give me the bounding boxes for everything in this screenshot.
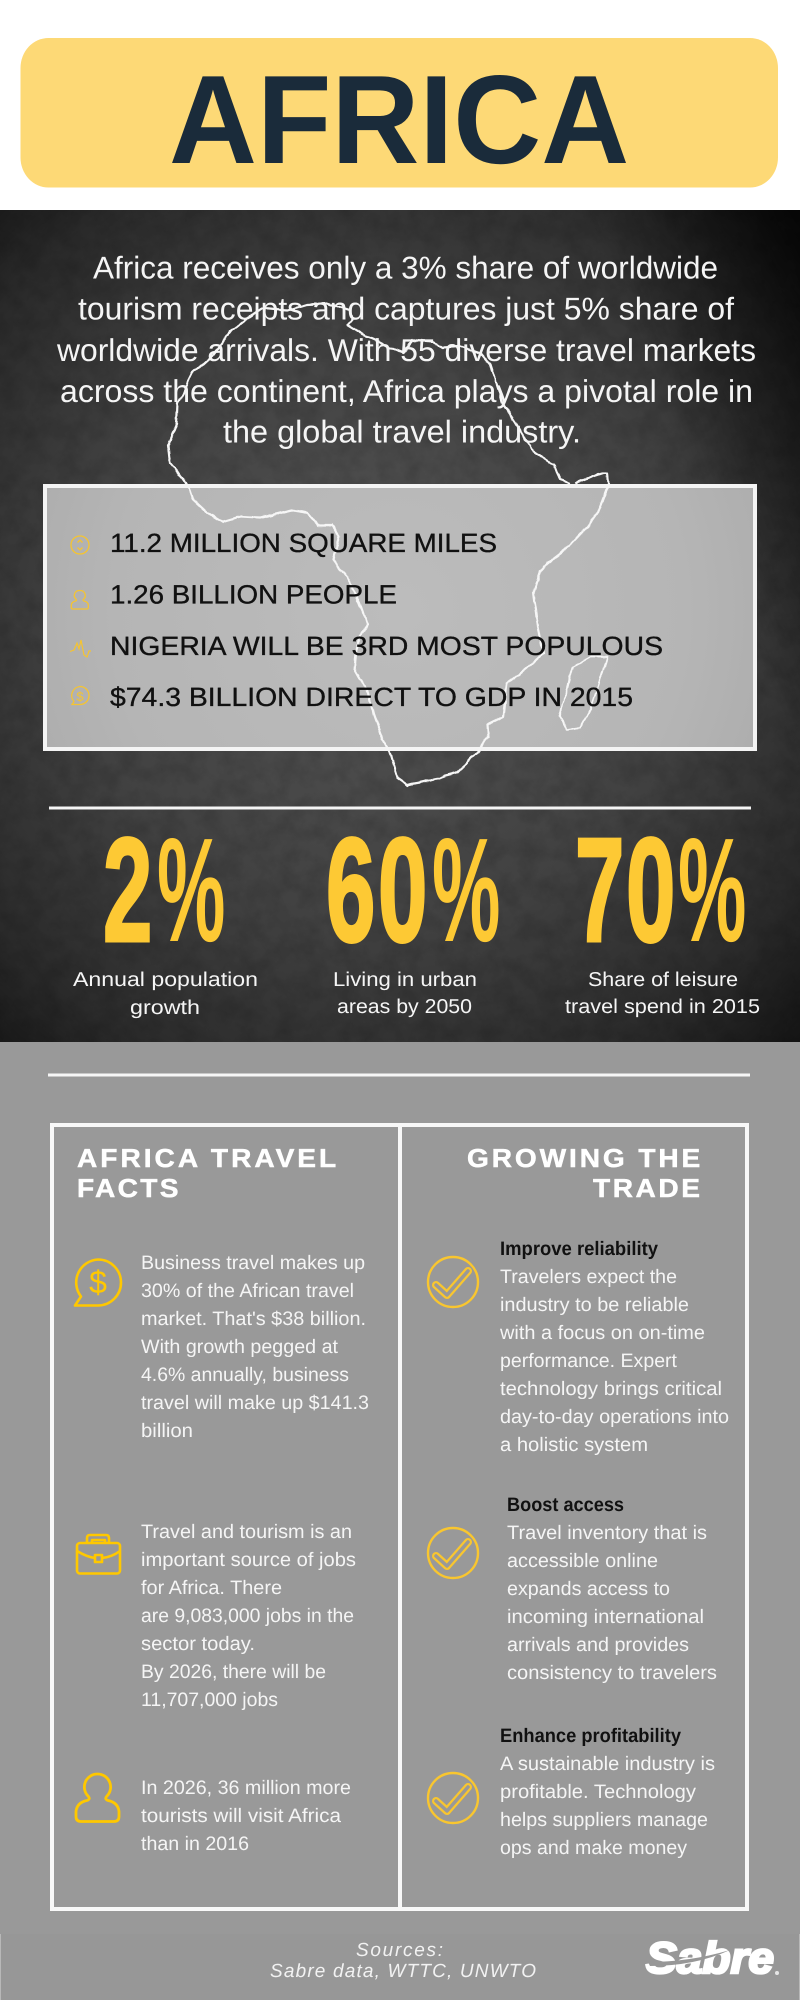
stat: 2% <box>73 808 258 1019</box>
text: business travel: 4.6% annually, business <box>141 1364 349 1386</box>
title banner <box>20 38 778 190</box>
text: tourists <box>141 1777 351 1855</box>
icon: dollar bubble small <box>72 686 89 704</box>
text: business travel: billion <box>141 1420 193 1442</box>
stat: 70%: % <box>678 808 746 973</box>
list: key statistics: NIGERIA WILL BE 3RD MOST POPULOUS <box>110 631 663 661</box>
text: boost access: expands access to <box>507 1578 670 1600</box>
stat: 70% <box>565 808 760 1018</box>
stat caption: Annual population <box>73 969 258 991</box>
text: boost access: incoming international <box>507 1606 704 1628</box>
panel: Africa travel facts <box>75 1143 369 1855</box>
text: jobs: 11,707,000 jobs <box>141 1689 278 1711</box>
panel: grey lower section <box>0 1042 800 2000</box>
text: business travel: With growth pegged at <box>141 1336 339 1358</box>
icon: dollar bubble small: $ <box>76 689 84 704</box>
text: improve reliability: Travelers expect the <box>500 1266 677 1288</box>
text: boost access: arrivals and provides <box>507 1634 689 1656</box>
text: improve reliability: a holistic system <box>500 1434 648 1456</box>
heading: FACTS <box>77 1173 179 1203</box>
text: tourists: than in 2016 <box>141 1833 249 1855</box>
stat: 60% <box>326 808 500 1018</box>
text: business travel: travel will make up $141.3 <box>141 1392 369 1414</box>
icon: dollar speech bubble: $ <box>89 1264 107 1300</box>
stat: 60%: 0 <box>378 808 427 973</box>
logo: Sabre: Sabre <box>646 1934 774 1983</box>
text: boost access: consistency to travelers <box>507 1662 717 1684</box>
map: outline of Africa <box>168 303 608 785</box>
stat caption <box>73 969 258 1019</box>
text: jobs: By 2026, there will be <box>141 1661 326 1683</box>
intro text <box>56 250 756 450</box>
heading: TRADE <box>593 1173 700 1203</box>
text: improve reliability: performance. Expert <box>500 1350 678 1372</box>
text: enhance profitability: helps suppliers manage <box>500 1809 708 1831</box>
stat caption: Living in urban <box>333 969 477 991</box>
intro text: worldwide arrivals. With 55 diverse travel markets <box>56 332 756 368</box>
icon: briefcase <box>77 1535 120 1574</box>
stat: 2%: % <box>157 808 225 973</box>
intro text: Africa receives only a 3% share of worldwide <box>93 250 718 286</box>
icon: dollar speech bubble <box>75 1260 121 1306</box>
icon: person <box>76 1774 119 1822</box>
text: business travel: 30% of the African travel <box>141 1280 354 1302</box>
text: boost access: accessible online <box>507 1550 658 1572</box>
text: improve reliability: with a focus on on-time <box>499 1322 705 1344</box>
text: business travel <box>141 1252 369 1442</box>
heading: GROWING THE <box>467 1143 700 1173</box>
text: tourists: In 2026, 36 million more <box>141 1777 351 1799</box>
text: improve reliability: industry to be reliable <box>500 1294 689 1316</box>
panel: two column frame <box>52 1125 747 1909</box>
text: boost access <box>507 1494 717 1684</box>
divider <box>49 806 751 810</box>
text: improve reliability: technology brings critical <box>500 1378 722 1400</box>
text: jobs: important source of jobs <box>141 1549 356 1571</box>
text: improve reliability <box>499 1238 729 1456</box>
list: key statistics: 11.2 MILLION SQUARE MILES <box>110 528 497 558</box>
stat: 70%: 0 <box>626 808 675 973</box>
icon: person small <box>71 590 88 609</box>
text: improve reliability: Improve reliability <box>500 1238 658 1260</box>
text: jobs: sector today. <box>141 1633 255 1655</box>
stat caption: areas by 2050 <box>337 996 472 1018</box>
text: enhance profitability <box>500 1725 715 1859</box>
panel: dark chalkboard overview <box>0 210 800 1042</box>
heading <box>77 1143 336 1203</box>
text: jobs: Travel and tourism is an <box>141 1521 352 1543</box>
text: jobs <box>141 1521 356 1711</box>
icon: area circle <box>71 536 89 554</box>
list: key statistics: $74.3 BILLION DIRECT TO GDP IN 2015 <box>110 682 633 712</box>
title: AFRICA <box>169 49 629 190</box>
text: boost access: Boost access <box>507 1494 624 1516</box>
stat caption <box>565 969 760 1018</box>
intro text: tourism receipts and captures just 5% share of <box>78 290 734 326</box>
list: key statistics <box>110 528 663 712</box>
stat caption: growth <box>130 997 200 1019</box>
stat: 70%: 7 <box>575 808 624 973</box>
text: jobs: for Africa. There <box>141 1577 282 1599</box>
text: tourists: tourists will visit Africa <box>141 1805 341 1827</box>
intro text: the global travel industry. <box>223 414 581 450</box>
list: key statistics: 1.26 BILLION PEOPLE <box>110 580 397 610</box>
stat: 2%: 2 <box>103 808 152 973</box>
footer band <box>0 1934 800 2000</box>
icon: pulse <box>70 640 91 657</box>
icon: check access <box>428 1528 478 1578</box>
intro text: across the continent, Africa plays a pivotal role in <box>60 373 753 409</box>
text: jobs: are 9,083,000 jobs in the <box>141 1605 354 1627</box>
text: business travel: Business travel makes up <box>141 1252 365 1274</box>
text: enhance profitability: A sustainable industry is <box>500 1753 715 1775</box>
icon: check reliability <box>428 1257 478 1307</box>
heading: AFRICA TRAVEL <box>77 1143 336 1173</box>
text: enhance profitability: Enhance profitability <box>500 1725 681 1747</box>
text: enhance profitability: ops and make money <box>500 1837 687 1859</box>
stat: 60%: 6 <box>326 808 375 973</box>
sources: Sources: <box>356 1940 443 1961</box>
panel: growing the trade <box>428 1143 729 1859</box>
text: improve reliability: day-to-day operations into <box>500 1406 729 1428</box>
stat: 60%: % <box>432 808 500 973</box>
text: enhance profitability: profitable. Technology <box>500 1781 696 1803</box>
divider <box>48 1074 750 1076</box>
stat caption: Share of leisure <box>588 969 738 991</box>
sources: Sabre data, WTTC, UNWTO <box>270 1961 536 1982</box>
heading <box>467 1143 700 1203</box>
stats box <box>45 486 755 749</box>
map: Madagascar <box>560 657 607 730</box>
icon: check profitability <box>428 1773 478 1823</box>
text: boost access: Travel inventory that is <box>507 1522 707 1544</box>
stat caption <box>333 969 477 1018</box>
sources <box>270 1940 536 1982</box>
stat caption: travel spend in 2015 <box>565 996 760 1018</box>
text: business travel: market. That's $38 billion. <box>141 1308 366 1330</box>
